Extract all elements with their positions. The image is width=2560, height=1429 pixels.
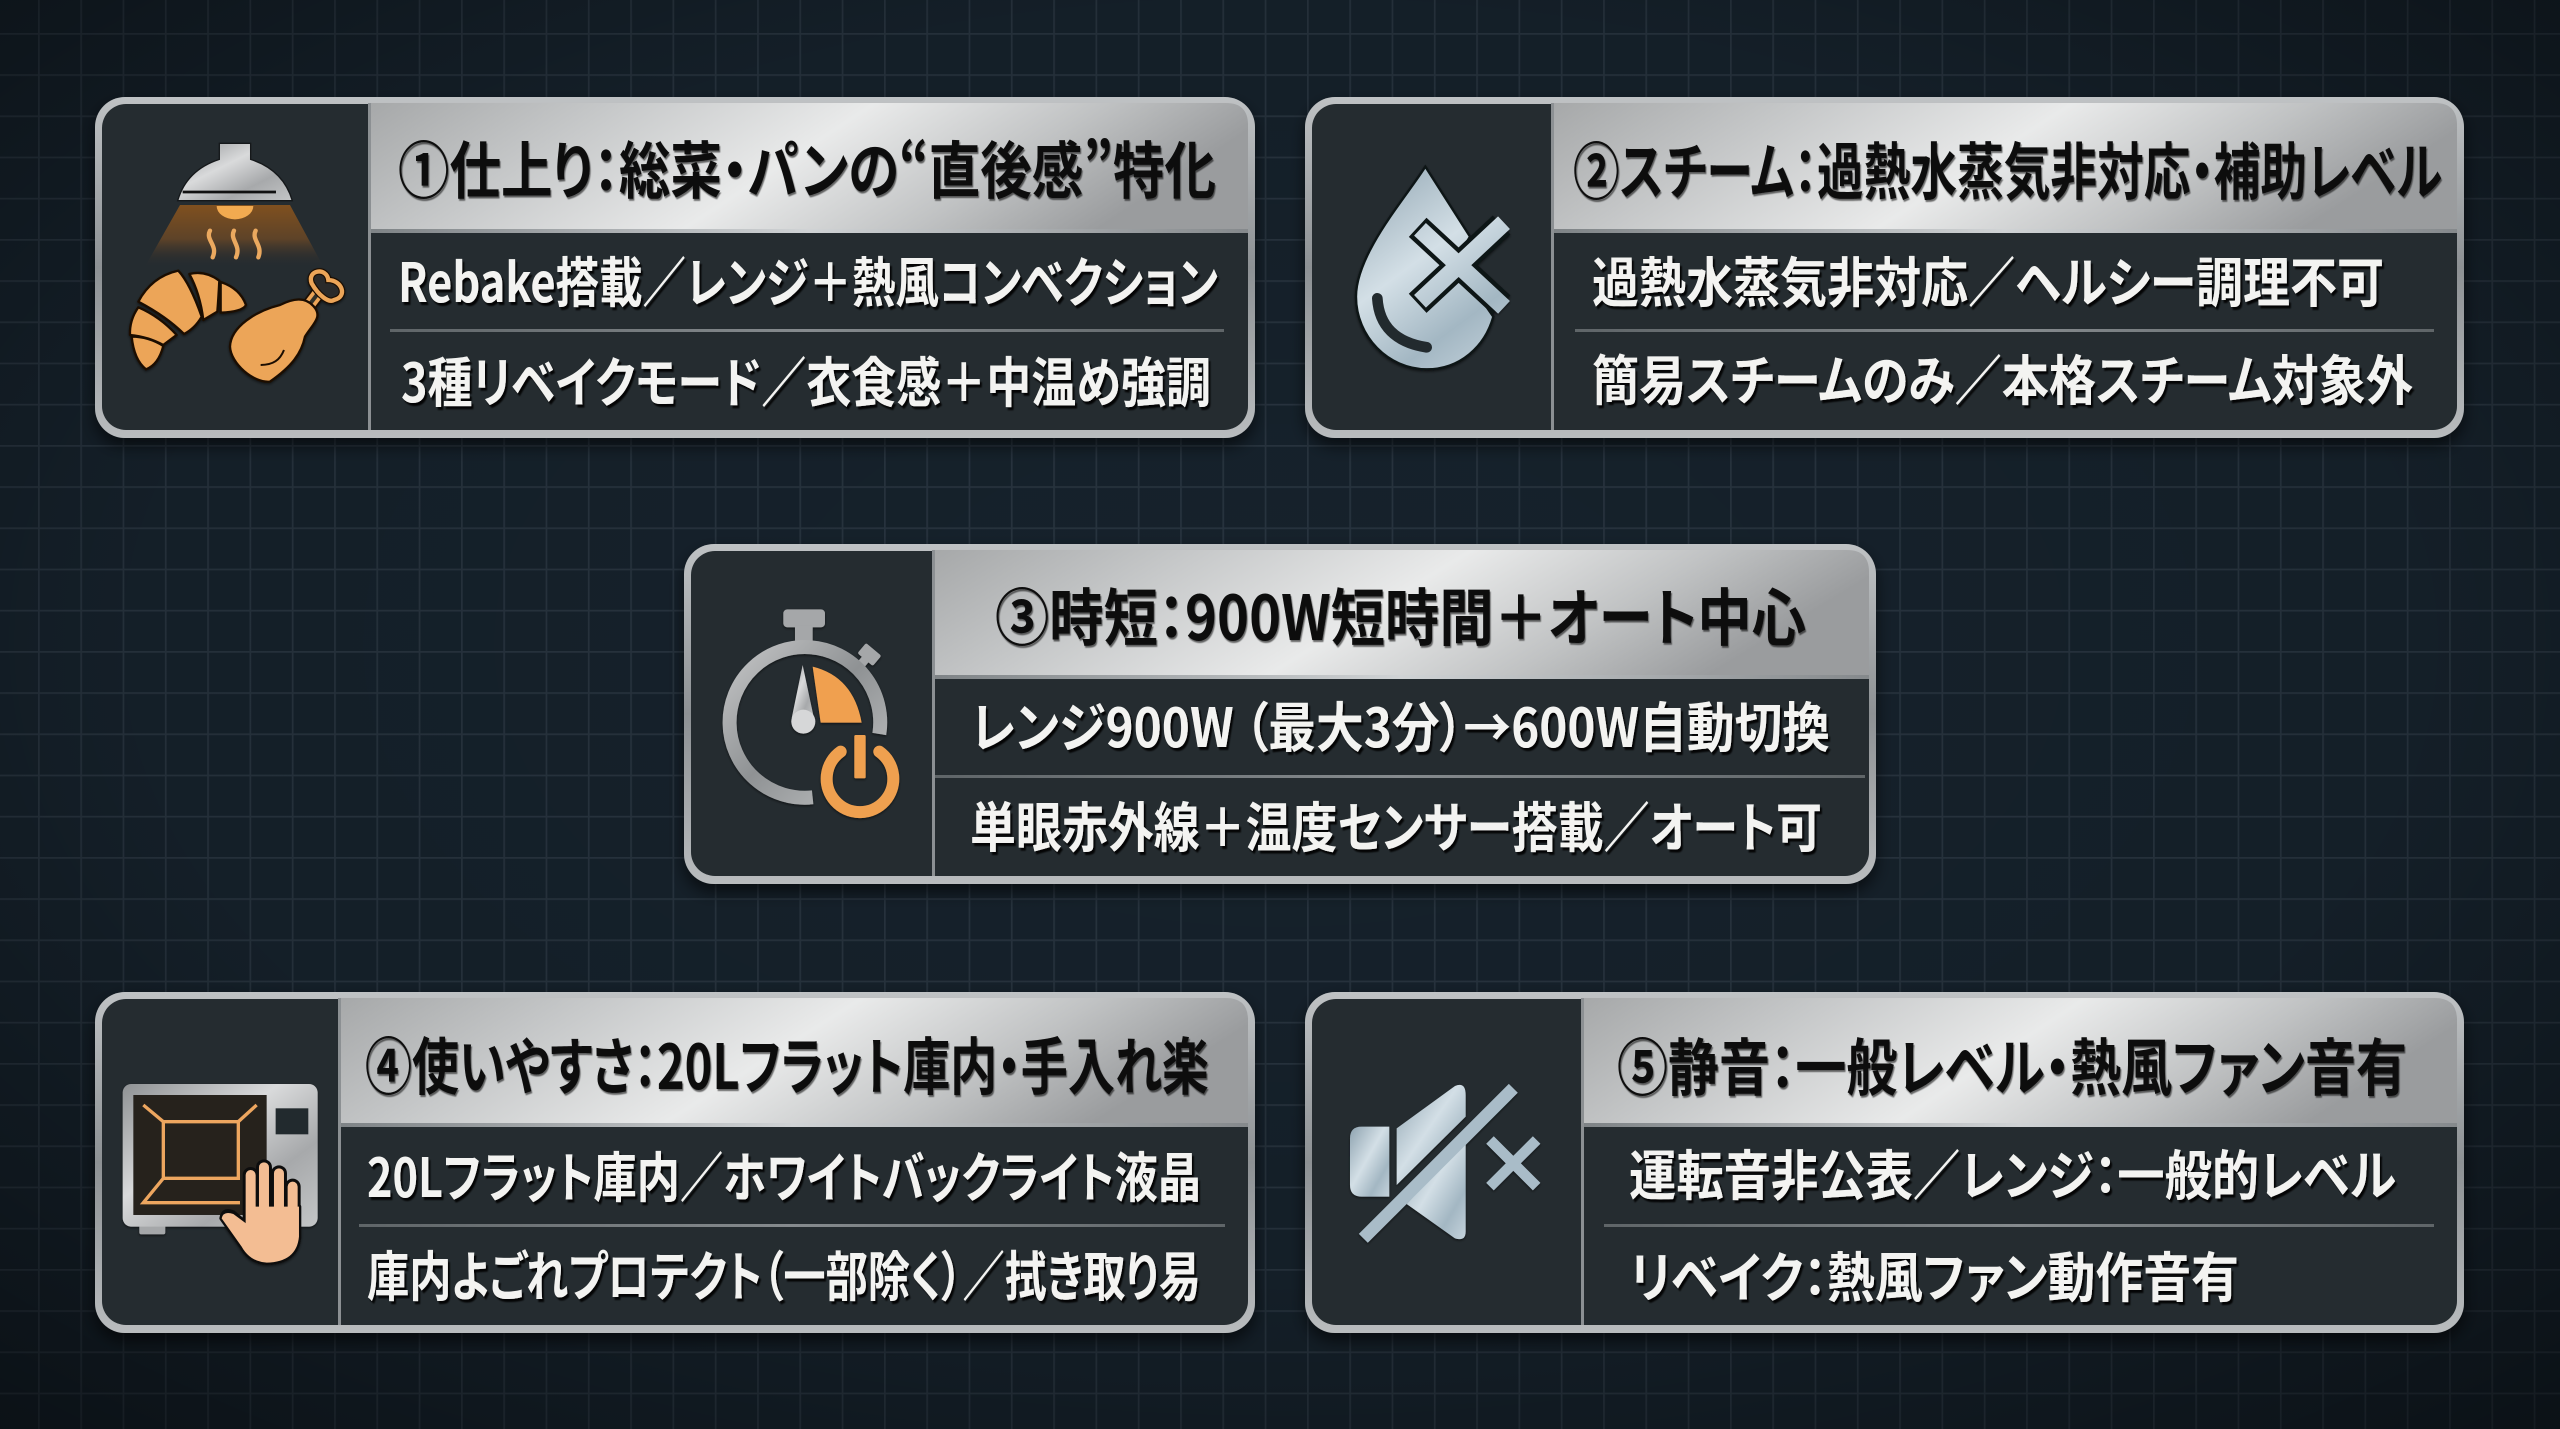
panel frame <box>95 992 1255 1333</box>
header plate <box>369 103 1248 230</box>
header rule <box>933 675 1869 679</box>
header plate <box>1552 103 2457 230</box>
row divider <box>935 775 1865 778</box>
icon: muted speaker <box>1350 1085 1537 1239</box>
panel body <box>691 551 1869 876</box>
panel: finish <box>95 97 1255 438</box>
header rule <box>339 1123 1248 1127</box>
header rule <box>1552 229 2457 233</box>
icon column rule <box>368 103 371 430</box>
line 2: 簡易スチームのみ／本格スチーム対象外 <box>1592 337 2413 416</box>
line 1: 運転音非公表／レンジ：一般的レベル <box>1629 1132 2396 1211</box>
line 1: 20Lフラット庫内／ホワイトバックライト液晶 <box>367 1134 1201 1213</box>
icon: stopwatch with power symbol <box>730 609 893 812</box>
panel frame <box>95 97 1255 438</box>
line 1: Rebake搭載／レンジ＋熱風コンベクション <box>398 239 1218 318</box>
icon column rule <box>1551 103 1554 430</box>
line 1: レンジ900W （最大3分）→600W自動切換 <box>971 684 1830 763</box>
icon: water drop with cross <box>1356 167 1504 369</box>
panel: quietness <box>1305 992 2464 1333</box>
line 2: リベイク：熱風ファン動作音有 <box>1630 1234 2239 1313</box>
header plate <box>1582 998 2457 1124</box>
panel frame <box>684 544 1876 884</box>
line 2: 庫内よごれプロテクト（一部除く）／拭き取り易 <box>367 1233 1201 1312</box>
heading: ①仕上り：総菜・パンの“直後感”特化 <box>398 121 1216 211</box>
panel body <box>1312 999 2457 1325</box>
header plate <box>933 550 1869 676</box>
heading: ⑤静音：一般レベル・熱風ファン音有 <box>1617 1018 2407 1108</box>
panel: time saving <box>684 544 1876 884</box>
line 2: 単眼赤外線＋温度センサー搭載／オート可 <box>970 784 1822 863</box>
row divider <box>1575 329 2434 332</box>
row divider <box>390 329 1224 332</box>
heading: ③時短：900W短時間＋オート中心 <box>995 568 1806 658</box>
panel frame <box>1305 97 2464 438</box>
icon column rule <box>338 998 341 1325</box>
panel body <box>102 999 1248 1325</box>
panel: steam <box>1305 97 2464 438</box>
line 1: 過熱水蒸気非対応／ヘルシー調理不可 <box>1592 239 2384 318</box>
icon column rule <box>932 550 935 876</box>
header plate <box>339 998 1248 1124</box>
panel body <box>1312 104 2457 430</box>
panel body <box>102 104 1248 430</box>
header rule <box>369 229 1248 233</box>
icon: lamp with croissant and drumstick <box>130 143 342 382</box>
panel frame <box>1305 992 2464 1333</box>
line 2: 3種リベイクモード／衣食感＋中温め強調 <box>401 339 1211 418</box>
row divider <box>1604 1224 2434 1227</box>
icon column rule <box>1581 998 1584 1325</box>
row divider <box>359 1224 1225 1227</box>
icon: microwave and hand <box>123 1084 318 1263</box>
header rule <box>1582 1123 2457 1127</box>
heading: ④使いやすさ：20Lフラット庫内・手入れ楽 <box>365 1017 1209 1107</box>
panel: usability <box>95 992 1255 1333</box>
